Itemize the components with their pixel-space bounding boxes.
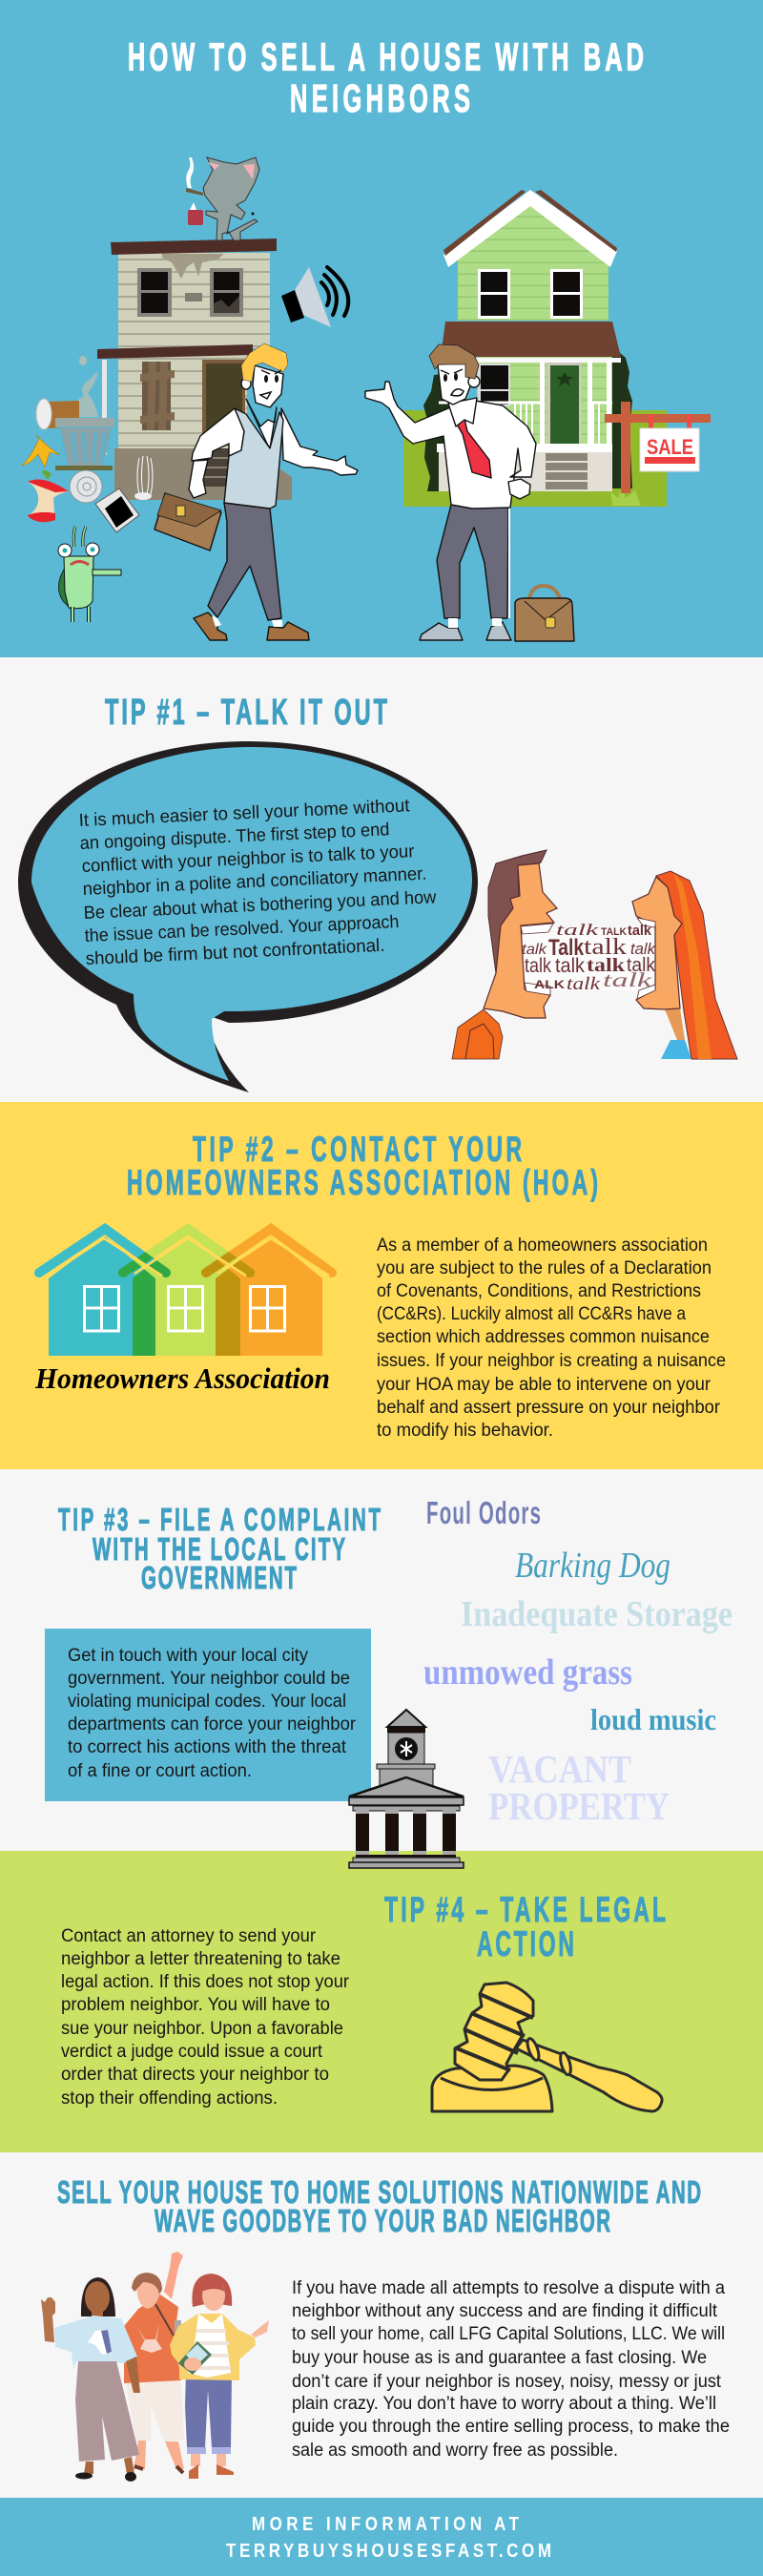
left person [41, 2277, 140, 2482]
bubble text [78, 796, 437, 969]
heading: tip 2: TIP #2 – CONTACT YOUR [193, 1129, 522, 1169]
word cloud: nuisances: unmowed grass [423, 1652, 632, 1693]
word cloud: nuisances: Barking Dog [515, 1546, 670, 1586]
illustration: run-down house [97, 239, 292, 500]
talk words: ALK [534, 978, 565, 991]
title: HOW TO SELL A HOUSE WITH BAD [128, 35, 644, 79]
word cloud: nuisances: VACANT [488, 1747, 631, 1791]
text block: tip 4: order that directs your neighbor to [61, 2065, 329, 2085]
bubble text: should be firm but not confrontational. [85, 936, 385, 969]
text block: tip 4: problem neighbor. You will have to [61, 1995, 330, 2015]
talk words: talk [525, 955, 551, 977]
talk words: Talk [548, 935, 585, 961]
heading: sell your house: SELL YOUR HOUSE TO HOME SOLUTIONS NATIONWIDE AND [57, 2174, 701, 2210]
illustration: three friends [41, 2252, 269, 2482]
heading: tip 3: WITH THE LOCAL CITY [93, 1531, 345, 1567]
text block: sell your house [292, 2278, 730, 2461]
panel: hero [0, 0, 763, 657]
heading: tip 2 [127, 1129, 598, 1202]
footer: TERRYBUYSHOUSESFAST.COM [226, 2540, 551, 2561]
text block: sell your house: If you have made all attempts to resolve a dispute with a [292, 2278, 725, 2298]
heading: sell your house [57, 2174, 701, 2238]
talk words: talk [627, 955, 656, 976]
heading: tip 3 [58, 1502, 381, 1595]
talk words: talk [603, 968, 652, 991]
illustration: trash pile [22, 356, 139, 532]
talk words [522, 921, 656, 994]
icon: gavel [432, 1983, 662, 2111]
text block: sell your house: buy your house as is and guarantee a fast closing. We [292, 2348, 707, 2368]
bubble text: an ongoing dispute. The first step to end [79, 820, 390, 854]
logo caption: Homeowners Association [34, 1361, 330, 1395]
talk words: talk [584, 935, 627, 960]
icon: homeowners association houses [39, 1229, 332, 1356]
text block: tip 2: As a member of a homeowners association [377, 1236, 708, 1256]
word cloud: nuisances: loud music [590, 1702, 716, 1736]
heading: tip 1: TIP #1 – TALK IT OUT [105, 691, 387, 732]
text block: tip 2: (CC&Rs). Luckily almost all CC&Rs have a [377, 1304, 686, 1324]
footer: MORE INFORMATION AT [252, 2513, 520, 2534]
illustration: blond neighbor with briefcase [155, 343, 358, 640]
talk words: talk [567, 974, 601, 994]
talk words: talk [555, 955, 585, 977]
callout: local government: violating municipal codes. Your local [68, 1692, 346, 1712]
heading: tip 4: ACTION [477, 1923, 574, 1963]
sale sign: SALE [647, 435, 693, 459]
panel: tip 3 [0, 1469, 763, 1851]
text block: tip 2: you are subject to the rules of a Declaration [377, 1258, 711, 1278]
talk words: talk [630, 940, 656, 958]
text block: sell your house: neighbor without any success and are finding it difficult [292, 2301, 718, 2321]
heading: sell your house: WAVE GOODBYE TO YOUR BAD NEIGHBOR [155, 2203, 610, 2238]
heading: tip 4 [384, 1889, 666, 1963]
text block: tip 2: behalf and assert pressure on your neighbor [377, 1398, 721, 1418]
bubble text: neighbor in a polite and conciliatory manner. [82, 864, 427, 900]
middle person [124, 2252, 184, 2473]
illustration: briefcase on the ground [515, 586, 574, 641]
talk words: TALK [601, 926, 627, 938]
word cloud: nuisances: Inadequate Storage [461, 1594, 732, 1634]
right person [170, 2274, 269, 2479]
illustration: grumpy bug [58, 527, 121, 622]
text block: tip 4: Contact an attorney to send your [61, 1926, 317, 1946]
text block: sell your house: plain crazy. You don’t have to worry about a thing. We’ll [292, 2394, 716, 2414]
text block: tip 2: of Covenants, Conditions, and Restrictions [377, 1281, 701, 1301]
illustration: two people arguing [452, 850, 737, 1059]
panel: tip 1 [0, 657, 763, 1102]
title: NEIGHBORS [290, 77, 470, 121]
heading: tip 2: HOMEOWNERS ASSOCIATION (HOA) [127, 1162, 598, 1202]
word cloud: nuisances [423, 1495, 732, 1828]
text block: tip 2: section which addresses common nuisance [377, 1327, 710, 1347]
text block: tip 4 [61, 1926, 350, 2109]
text block: sell your house: to sell your home, call LFG Capital Solutions, LLC. We will [292, 2324, 725, 2344]
illustration: green house for sale [403, 190, 711, 507]
bubble text: Be clear about what is bothering you and how [83, 887, 437, 924]
panel: tip 2 [0, 1102, 763, 1469]
sale sign [605, 402, 711, 493]
illustration: city hall building [349, 1710, 464, 1868]
text block: tip 2 [377, 1236, 726, 1441]
text block: tip 4: neighbor a letter threatening to take [61, 1949, 340, 1969]
word cloud: nuisances: Foul Odors [426, 1495, 541, 1530]
talk words: talk [522, 942, 547, 958]
bubble text: It is much easier to sell your home without [78, 796, 411, 831]
text block: tip 2: to modify his behavior. [377, 1421, 553, 1441]
callout: local government: of a fine or court action. [68, 1761, 252, 1781]
callout: local government: Get in touch with your local city [68, 1646, 308, 1666]
bubble text: the issue can be resolved. Your approach [84, 912, 400, 946]
text block: tip 2: issues. If your neighbor is creating a nuisance [377, 1351, 726, 1371]
panel: sell your house [0, 2152, 763, 2498]
word cloud: nuisances: PROPERTY [488, 1784, 670, 1828]
talk words: talk [628, 923, 652, 939]
text block: tip 4: stop their offending actions. [61, 2088, 278, 2109]
callout: local government: government. Your neighbor could be [68, 1669, 350, 1689]
talk words: talk [587, 955, 626, 976]
heading: tip 3: GOVERNMENT [141, 1560, 297, 1595]
panel: tip 4 [0, 1851, 763, 2152]
talk words: talk [556, 921, 599, 939]
text block: tip 4: sue your neighbor. Upon a favorable [61, 2019, 343, 2039]
callout: local government [45, 1629, 371, 1801]
footer [0, 2498, 763, 2576]
heading: tip 3: TIP #3 – FILE A COMPLAINT [58, 1502, 381, 1537]
illustration: angry homeowner [365, 344, 536, 640]
illustration: smoking cat [186, 157, 259, 240]
text block: sell your house: guide you through the entire selling process, to make the [292, 2417, 730, 2437]
callout: local government: departments can force your neighbor [68, 1714, 357, 1735]
heading: tip 4: TIP #4 – TAKE LEGAL [384, 1889, 666, 1929]
bubble text: conflict with your neighbor is to talk to your [81, 841, 416, 877]
icon: loud speaker [281, 267, 348, 327]
text block: tip 4: verdict a judge could issue a court [61, 2042, 323, 2062]
callout: local government: to correct his actions with the threat [68, 1737, 347, 1757]
text block: tip 4: legal action. If this does not stop your [61, 1972, 350, 1992]
text block: sell your house: sale as smooth and worry free as possible. [292, 2441, 618, 2461]
title [128, 35, 644, 121]
text block: tip 2: your HOA may be able to intervene on your [377, 1375, 711, 1395]
speech bubble [18, 741, 478, 1092]
text block: sell your house: don’t care if your neighbor is nosey, noisy, messy or just [292, 2372, 722, 2392]
